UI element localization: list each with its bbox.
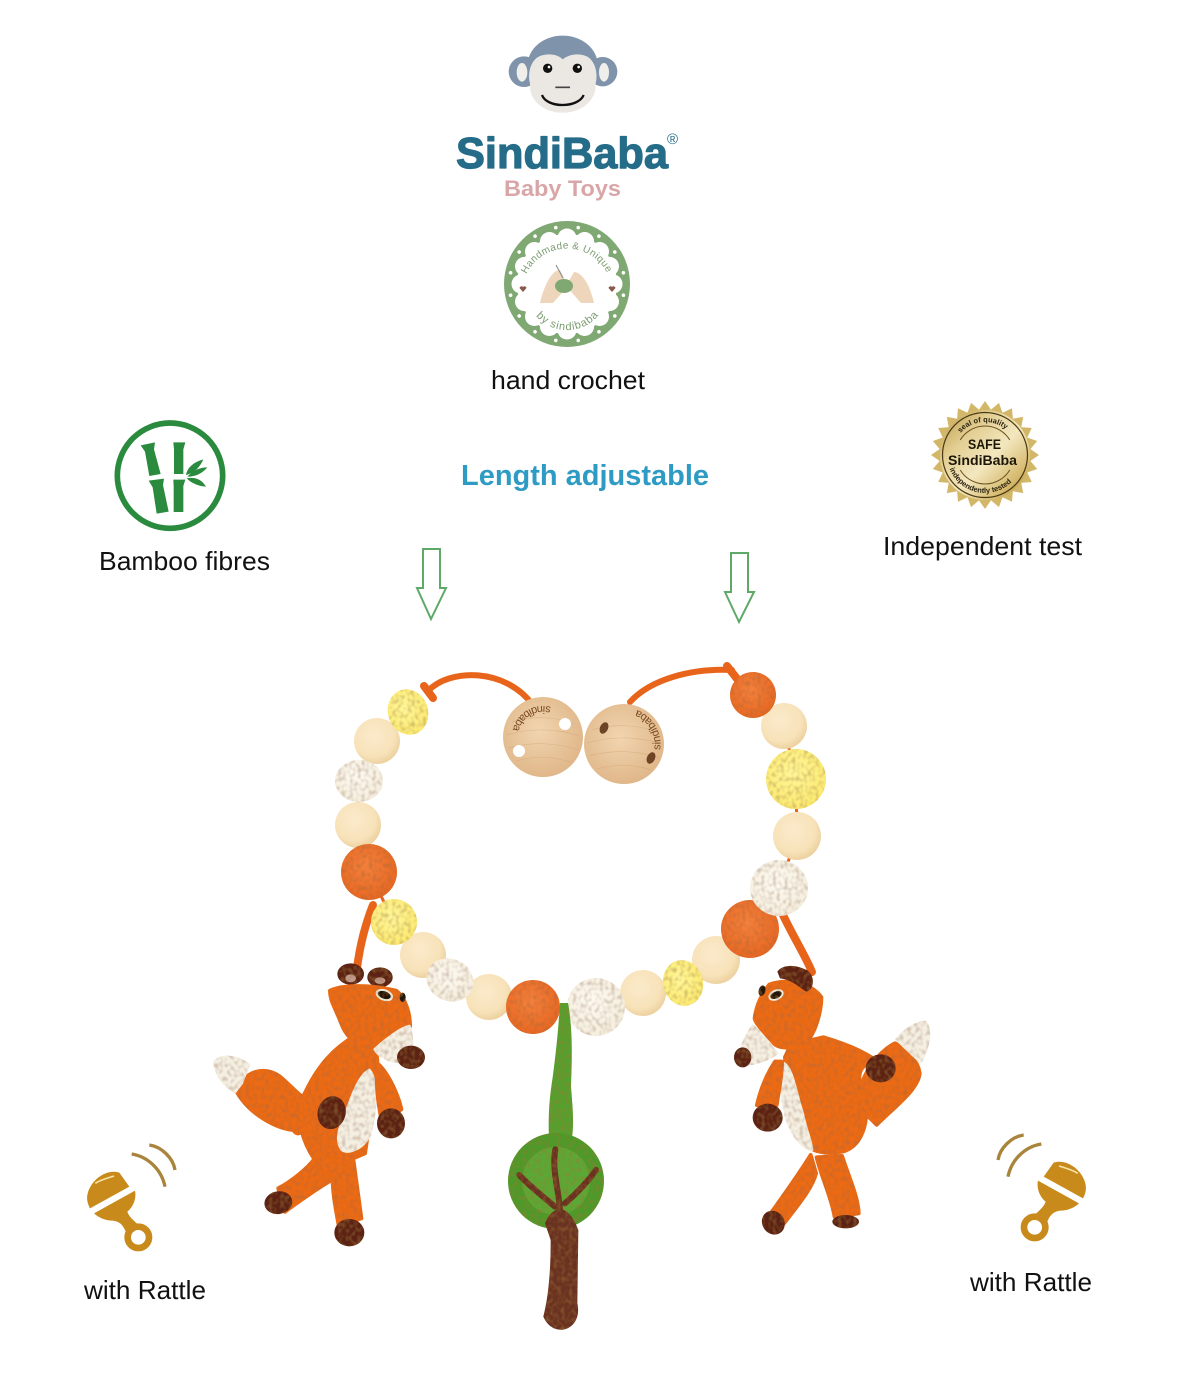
wooden clip right: sindibaba	[636, 710, 660, 750]
icon: gold safety seal	[931, 401, 1039, 509]
heading: Length adjustable: Length adjustable	[461, 460, 709, 492]
icon: SindiBaba monkey logo	[509, 36, 617, 113]
arrow: left down arrow	[417, 549, 446, 619]
icon: gold safety seal: independently tested	[950, 467, 1012, 494]
orange cords	[357, 666, 812, 1007]
logo subtitle: Baby Toys: Baby Toys	[504, 176, 621, 201]
icon: gold safety seal: SAFE	[968, 437, 1001, 452]
label: with Rattle left: with Rattle	[83, 1275, 206, 1305]
wooden beads	[335, 703, 821, 1020]
wooden clip left	[503, 697, 583, 777]
crochet fox left	[215, 963, 425, 1246]
icon: gold safety seal: SindiBaba	[948, 452, 1017, 468]
arrow: right down arrow	[725, 553, 754, 622]
label: Independent test: Independent test	[883, 531, 1083, 561]
icon: rattle left	[87, 1145, 175, 1248]
icon: gold safety seal: seal of quality	[958, 416, 1008, 432]
icon: rattle right	[998, 1135, 1086, 1238]
crochet beads	[335, 672, 826, 1036]
icon: handmade and unique badge: Handmade & Unique	[520, 242, 611, 274]
registered trademark mark: ®	[667, 131, 678, 148]
wooden clip left: sindibaba	[512, 706, 550, 730]
logo wordmark: SindiBaba: SindiBaba	[456, 129, 669, 178]
crochet tree toy	[508, 1003, 604, 1330]
icon: bamboo fibres	[117, 423, 223, 528]
label: with Rattle right: with Rattle	[969, 1267, 1092, 1297]
icon: handmade and unique badge: by sindibaba	[536, 310, 598, 330]
label: Bamboo fibres: Bamboo fibres	[99, 546, 270, 576]
crochet fox right	[734, 966, 929, 1239]
wooden clip right	[584, 704, 664, 784]
icon: handmade and unique badge	[504, 221, 630, 347]
product: bead chain with clips and toys	[213, 662, 930, 1330]
label: hand crochet: hand crochet	[491, 365, 646, 395]
